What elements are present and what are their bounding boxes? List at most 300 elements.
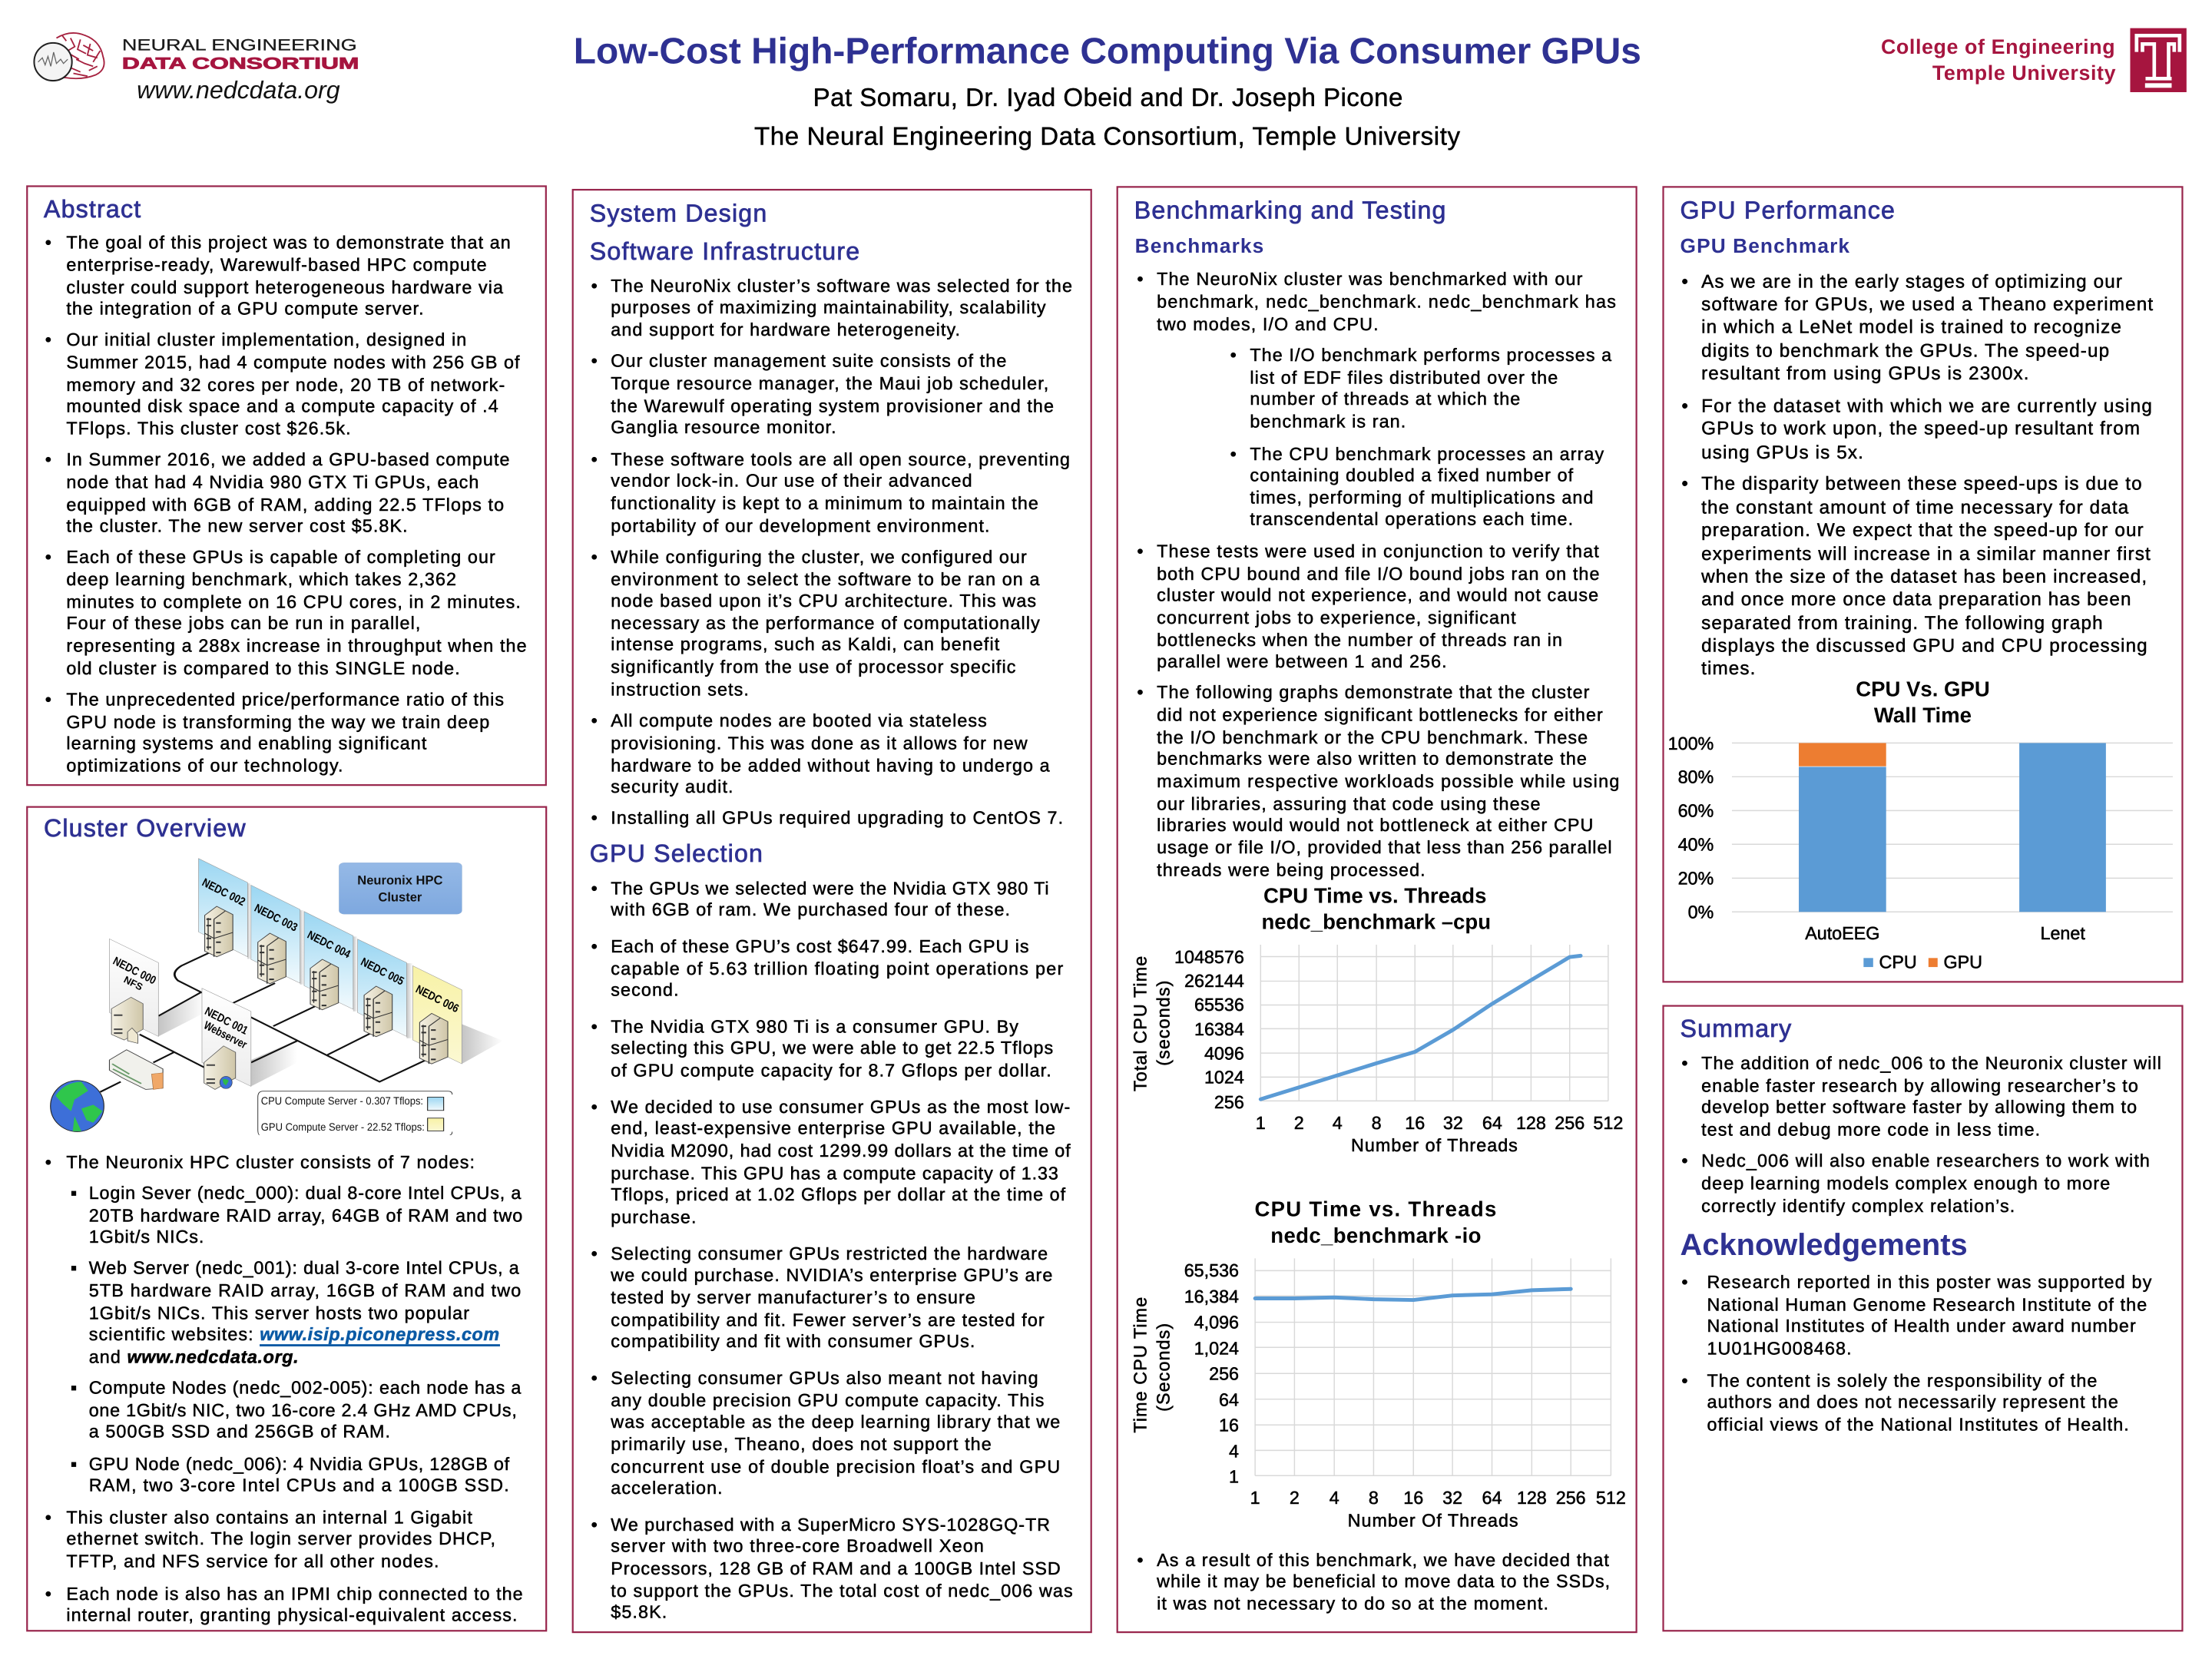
college name: Temple University xyxy=(1932,63,2117,85)
text: software infrastructure bullets: functionality is kept to a minimum to maintain the xyxy=(611,494,1039,514)
heading: GPU benchmark: GPU Benchmark xyxy=(1681,236,1850,258)
text: GPU benchmark bullets: and once more once data preparation has been xyxy=(1701,588,2132,609)
text: software infrastructure bullets: • xyxy=(591,276,598,296)
heading: GPU performance: GPU Performance xyxy=(1681,196,1896,224)
text: benchmark bullets: concurrent jobs to experience, significant xyxy=(1157,608,1517,628)
text: software infrastructure bullets xyxy=(591,276,1073,828)
panel: cluster overview xyxy=(27,807,546,1631)
text: abstract bullets: The goal of this project was to demonstrate that an xyxy=(66,233,512,253)
text: abstract bullets: equipped with 6GB of RAM, adding 22.5 TFlops to xyxy=(66,495,505,515)
text: abstract bullets: Our initial cluster implementation, designed in xyxy=(66,330,467,350)
text: node list: scientific websites: xyxy=(89,1325,260,1344)
text: abstract bullets: mounted disk space and a compute capacity of .4 xyxy=(66,396,499,416)
text: abstract bullets: old cluster is compared to this SINGLE node. xyxy=(66,659,461,678)
text: benchmark bullets: These tests were used in conjunction to verify that xyxy=(1157,541,1600,561)
text: GPU selection bullets: compatibility and fit. Fewer server’s are tested for xyxy=(611,1310,1045,1330)
title: Low-Cost High-Performance Computing Via Consumer GPUs xyxy=(574,30,1641,72)
text: software infrastructure bullets: provisioning. This was done as it allows for new xyxy=(611,733,1028,753)
text: software infrastructure bullets: All compute nodes are booted via stateless xyxy=(611,711,988,730)
text: benchmark bullets xyxy=(1137,270,1621,880)
text: software infrastructure bullets: hardware to be added without having to undergo a xyxy=(611,756,1051,776)
chart: CPU time vs threads, cpu benchmark: 1048576 xyxy=(1174,948,1244,968)
text: software infrastructure bullets: intense programs, such as Kaldi, can benefit xyxy=(611,635,1000,654)
text: abstract bullets: • xyxy=(45,690,52,710)
text: abstract bullets: memory and 32 cores per node, 20 TB of network- xyxy=(66,376,505,395)
chart: CPU time vs threads, cpu benchmark: Total CPU Time xyxy=(1131,955,1151,1091)
text: benchmark bullets: containing doubled a fixed number of xyxy=(1250,465,1574,485)
diagram: Neuronix HPC cluster network: NEDC 000 xyxy=(111,955,158,987)
text: GPU selection bullets: we could purchase. NVIDIA’s enterprise GPU’s are xyxy=(609,1266,1053,1285)
logo: Neural Engineering Data Consortium: www.nedcdata.org xyxy=(137,76,340,104)
chart: CPU time vs threads, io benchmark: Number Of Threads xyxy=(1348,1511,1519,1531)
text: GPU benchmark bullets: preparation. We expect that the speed-up for our xyxy=(1701,518,2144,540)
chart: CPU time vs threads, cpu benchmark: 65536 xyxy=(1194,995,1244,1015)
text: node list: Each node is also has an IPMI chip connected to the xyxy=(66,1584,524,1604)
text: GPU selection bullets: • xyxy=(591,1017,598,1037)
chart: CPU vs GPU wall time: CPU xyxy=(1879,953,1917,972)
text: GPU selection bullets: to support the GPUs. The total cost of nedc_006 was xyxy=(611,1581,1074,1601)
text: node list: • xyxy=(45,1584,52,1604)
text: GPU benchmark bullets: when the size of the dataset has been increased, xyxy=(1700,565,2147,586)
text: software infrastructure bullets: • xyxy=(591,450,598,470)
text: GPU selection bullets: • xyxy=(591,1098,598,1118)
chart: CPU time vs threads, io benchmark: 32 xyxy=(1442,1488,1462,1508)
text: summary bullets: correctly identify complex relation’s. xyxy=(1701,1197,2015,1216)
text: GPU benchmark bullets: • xyxy=(1681,472,1689,493)
text: GPU selection bullets: The GPUs we selected were the Nvidia GTX 980 Ti xyxy=(611,879,1050,899)
text: GPU benchmark bullets: using GPUs is 5x. xyxy=(1701,441,1864,462)
text: GPU selection bullets: capable of 5.63 trillion floating point operations per xyxy=(611,959,1065,979)
chart: CPU time vs threads, cpu benchmark: 4 xyxy=(1333,1114,1343,1134)
text: software infrastructure bullets: These software tools are all open source, preventing xyxy=(611,450,1071,470)
text: GPU selection bullets: • xyxy=(591,879,598,899)
chart: CPU vs GPU wall time: 0% xyxy=(1688,903,1714,922)
logo: Neural Engineering Data Consortium xyxy=(34,33,359,104)
text: node list: and xyxy=(89,1347,127,1367)
text: abstract bullets: The unprecedented price/performance ratio of this xyxy=(66,690,505,710)
chart: CPU time vs threads, cpu benchmark: 128 xyxy=(1516,1114,1546,1134)
chart: CPU vs GPU wall time: 20% xyxy=(1678,869,1714,889)
text: GPU benchmark bullets: software for GPUs, we used a Theano experiment xyxy=(1701,293,2154,314)
panel: system design xyxy=(573,190,1091,1632)
chart: CPU time vs threads, cpu benchmark: 4096 xyxy=(1204,1044,1244,1064)
icon: EEG circle xyxy=(34,43,72,81)
logo: Neural Engineering Data Consortium: NEURAL ENGINEERING xyxy=(122,38,357,55)
text: abstract bullets: cluster could support heterogeneous hardware via xyxy=(66,278,505,298)
text: benchmark bullets: • xyxy=(1137,270,1144,290)
diagram: Neuronix HPC cluster network: NEDC 001 xyxy=(203,1005,250,1038)
text: benchmark conclusion: while it may be beneficial to move data to the SSDs, xyxy=(1155,1571,1611,1591)
text: node list xyxy=(45,1153,524,1625)
text: benchmark bullets: parallel were between 1 and 256. xyxy=(1157,652,1448,671)
text: GPU selection bullets: tested by server manufacturer’s to ensure xyxy=(611,1288,976,1308)
text: abstract bullets: In Summer 2016, we added a GPU-based compute xyxy=(66,450,511,470)
text: summary bullets: deep learning models complex enough to more xyxy=(1701,1174,2111,1194)
text: GPU selection bullets: any double precision GPU compute capacity. This xyxy=(611,1391,1045,1411)
text: GPU selection bullets: with 6GB of ram. We purchased four of these. xyxy=(609,900,1011,920)
text: summary bullets xyxy=(1681,1054,2162,1216)
heading: summary: Summary xyxy=(1681,1015,1792,1042)
text: GPU selection bullets: server with two three-core Broadwell Xeon xyxy=(611,1536,985,1556)
diagram: Neuronix HPC cluster network: NEDC 005 xyxy=(359,955,406,988)
text: GPU benchmark bullets: • xyxy=(1681,394,1689,416)
text: GPU selection bullets: acceleration. xyxy=(611,1479,724,1498)
chart: CPU time vs threads, cpu benchmark: 32 xyxy=(1443,1114,1463,1134)
text: node list: 1Gbit/s NICs. This server hosts two popular xyxy=(89,1303,470,1323)
chart: CPU time vs threads, cpu benchmark: 256 xyxy=(1555,1114,1584,1134)
text: node list: www.isip.piconepress.com xyxy=(260,1325,500,1344)
chart: CPU time vs threads, cpu benchmark: (seconds) xyxy=(1154,980,1174,1066)
chart: CPU time vs threads, io benchmark: 512 xyxy=(1596,1488,1626,1508)
text: GPU benchmark bullets: As we are in the early stages of optimizing our xyxy=(1701,270,2123,291)
text: GPU selection bullets: purchase. xyxy=(611,1207,697,1227)
text: node list: • xyxy=(45,1153,52,1172)
text: GPU selection bullets: Selecting consumer GPUs also meant not having xyxy=(611,1369,1039,1388)
text: GPU selection bullets: Processors, 128 GB of RAM and a 100GB Intel SSD xyxy=(611,1559,1061,1578)
text: GPU selection bullets: • xyxy=(591,937,598,956)
text: node list: Web Server (nedc_001): dual 3-core Intel CPUs, a xyxy=(89,1258,520,1278)
chart: CPU time vs threads, io benchmark: 2 xyxy=(1290,1488,1300,1508)
text: node list: TFTP, and NFS service for all other nodes. xyxy=(66,1551,440,1571)
text: acknowledgements bullets: Research reported in this poster was supported by xyxy=(1707,1273,2153,1292)
text: abstract bullets xyxy=(45,233,528,776)
text: benchmark bullets: benchmark, nedc_benchmark. nedc_benchmark has xyxy=(1157,292,1617,312)
heading: cluster overview: Cluster Overview xyxy=(44,814,247,843)
chart: CPU time vs threads, io benchmark: 256 xyxy=(1209,1364,1239,1384)
text: node list: RAM, two 3-core Intel CPUs and a 100GB SSD. xyxy=(89,1475,510,1495)
heading: abstract: Abstract xyxy=(44,194,141,223)
text: GPU benchmark bullets: separated from training. The following graph xyxy=(1701,611,2104,633)
text: GPU benchmark bullets xyxy=(1681,270,2154,678)
text: software infrastructure bullets: instruction sets. xyxy=(611,680,750,700)
text: benchmark bullets: libraries would would not bottleneck at either CPU xyxy=(1157,816,1594,835)
text: summary bullets: • xyxy=(1681,1054,1689,1074)
heading: benchmarks: Benchmarks xyxy=(1135,236,1264,258)
text: software infrastructure bullets: node based upon it’s CPU architecture. This was xyxy=(611,591,1037,611)
text: benchmark bullets: The following graphs demonstrate that the cluster xyxy=(1157,683,1591,703)
icon: Temple T logo xyxy=(2130,28,2187,92)
diagram: Neuronix HPC cluster network: NEDC 002 xyxy=(200,876,247,909)
text: software infrastructure bullets: Torque resource manager, the Maui job scheduler, xyxy=(611,374,1049,393)
text: software infrastructure bullets: While configuring the cluster, we configured our xyxy=(611,548,1028,567)
text: GPU selection bullets: of GPU compute capacity for 8.7 Gflops per dollar. xyxy=(611,1061,1052,1081)
chart: CPU vs GPU wall time: GPU xyxy=(1943,953,1982,972)
text: acknowledgements bullets: • xyxy=(1681,1273,1689,1292)
text: GPU selection bullets: We decided to use consumer GPUs as the most low- xyxy=(611,1098,1071,1118)
text: GPU selection bullets: purchase. This GPU has a compute capacity of 1.33 xyxy=(611,1164,1059,1184)
text: benchmark conclusion: • xyxy=(1137,1551,1144,1570)
chart: CPU vs GPU wall time: 40% xyxy=(1678,835,1714,855)
text: node list: internal router, granting physical-equivalent access. xyxy=(66,1605,518,1625)
text: node list: Login Sever (nedc_000): dual 8-core Intel CPUs, a xyxy=(89,1184,522,1204)
text: abstract bullets: Four of these jobs can be run in parallel, xyxy=(66,614,421,634)
text: acknowledgements bullets: • xyxy=(1681,1371,1689,1391)
diagram: Neuronix HPC cluster network: NEDC 004 xyxy=(305,929,353,961)
text: software infrastructure bullets: significantly from the use of processor specific xyxy=(611,657,1017,677)
chart: CPU vs GPU wall time xyxy=(1668,678,2173,972)
chart: CPU time vs threads, io benchmark: (Seconds) xyxy=(1154,1323,1174,1412)
chart: CPU time vs threads, cpu benchmark: 262144 xyxy=(1184,972,1244,991)
chart: CPU vs GPU wall time: 80% xyxy=(1678,767,1714,787)
text: abstract bullets: deep learning benchmark, which takes 2,362 xyxy=(66,570,457,590)
text: benchmark bullets: maximum respective workloads possible while using xyxy=(1157,772,1621,791)
text: abstract bullets: enterprise-ready, Warewulf-based HPC compute xyxy=(66,255,488,275)
chart: CPU time vs threads, io benchmark: CPU Time vs. Threads xyxy=(1254,1197,1498,1222)
text: GPU benchmark bullets: For the dataset with which we are currently using xyxy=(1701,394,2153,416)
diagram: Neuronix HPC cluster network: Neuronix HPC xyxy=(357,873,443,887)
text: abstract bullets: minutes to complete on 16 CPU cores, in 2 minutes. xyxy=(66,592,522,612)
chart: CPU vs GPU wall time: Lenet xyxy=(2041,924,2086,944)
text: acknowledgements bullets: The content is solely the responsibility of the xyxy=(1707,1371,2098,1391)
text: GPU benchmark bullets: GPUs to work upon, the speed-up resultant from xyxy=(1701,417,2141,438)
panel: benchmarking and testing xyxy=(1118,187,1637,1632)
text: software infrastructure bullets: security audit. xyxy=(611,777,734,797)
panel: GPU performance xyxy=(1664,187,2182,982)
chart: CPU time vs threads, cpu benchmark: 64 xyxy=(1482,1114,1502,1134)
text: GPU selection bullets: Selecting consumer GPUs restricted the hardware xyxy=(611,1244,1048,1264)
text: benchmark bullets: The NeuroNix cluster was benchmarked with our xyxy=(1157,270,1584,290)
text: GPU selection bullets: Nvidia M2090, had cost 1299.99 dollars at the time of xyxy=(611,1141,1071,1161)
text: abstract bullets: • xyxy=(45,450,52,470)
chart: CPU time vs threads, io benchmark: 4,096 xyxy=(1194,1313,1239,1333)
text: summary bullets: The addition of nedc_006 to the Neuronix cluster will xyxy=(1701,1054,2162,1074)
text: GPU selection bullets: $5.8K. xyxy=(611,1603,667,1622)
text: acknowledgements bullets: National Institutes of Health under award number xyxy=(1707,1316,2137,1336)
text: acknowledgements bullets: 1U01HG008468. xyxy=(1707,1339,1853,1359)
chart: CPU time vs threads, io benchmark: Time CPU Time xyxy=(1131,1296,1151,1433)
diagram: Neuronix HPC cluster network: Webserver xyxy=(202,1019,250,1051)
text: GPU selection bullets: • xyxy=(591,1369,598,1388)
text: benchmark bullets: usage or file I/O, provided that less than 256 parallel xyxy=(1157,838,1613,858)
text: GPU benchmark bullets: experiments will increase in a similar manner first xyxy=(1701,542,2151,564)
text: abstract bullets: Each of these GPUs is capable of completing our xyxy=(66,548,496,567)
chart: CPU time vs threads, io benchmark: 64 xyxy=(1219,1390,1239,1410)
chart: CPU time vs threads, io benchmark: 256 xyxy=(1556,1488,1586,1508)
text: acknowledgements bullets: authors and does not necessarily represent the xyxy=(1707,1392,2119,1412)
text: abstract bullets: TFlops. This cluster cost $26.5k. xyxy=(66,419,352,439)
text: abstract bullets: • xyxy=(45,330,52,350)
chart: CPU time vs threads, io benchmark: 16,384 xyxy=(1184,1287,1239,1307)
chart: CPU time vs threads, cpu benchmark: nedc_benchmark –cpu xyxy=(1261,911,1491,935)
text: node list: • xyxy=(45,1508,52,1528)
text: GPU selection bullets: selecting this GPU, we were able to get 22.5 Tflops xyxy=(611,1038,1054,1058)
diagram: Neuronix HPC cluster network: GPU Compute Server - 22.52 Tflops: xyxy=(261,1121,425,1133)
text: benchmark bullets: the I/O benchmark or the CPU benchmark. These xyxy=(1157,728,1588,747)
text: node list: This cluster also contains an internal 1 Gigabit xyxy=(66,1508,473,1528)
panel: abstract xyxy=(27,186,546,785)
text: software infrastructure bullets: necessary as the performance of computationally xyxy=(611,614,1041,634)
text: GPU selection bullets: The Nvidia GTX 980 Ti is a consumer GPU. By xyxy=(611,1017,1019,1037)
heading: benchmarking and testing: Benchmarking and Testing xyxy=(1134,196,1447,224)
text: GPU selection bullets: compatibility and fit with consumer GPUs. xyxy=(611,1332,975,1352)
chart: CPU vs GPU wall time: Wall Time xyxy=(1874,704,1972,728)
text: summary bullets: enable faster research by allowing researcher’s to xyxy=(1701,1076,2139,1096)
text: summary bullets: Nedc_006 will also enable researchers to work with xyxy=(1701,1151,2151,1171)
chart: CPU time vs threads, cpu benchmark: 1024 xyxy=(1204,1068,1244,1088)
text: GPU selection bullets: was acceptable as the deep learning library that we xyxy=(609,1412,1061,1432)
chart: CPU time vs threads, cpu benchmark: 16384 xyxy=(1194,1020,1244,1040)
text: GPU benchmark bullets: digits to benchmark the GPUs. The speed-up xyxy=(1701,339,2110,360)
text: summary bullets: develop better software faster by allowing them to xyxy=(1701,1098,2137,1118)
college name: College of Engineering xyxy=(1881,37,2115,59)
text: software infrastructure bullets: environment to select the software to be ran on a xyxy=(611,570,1041,590)
icon: brain xyxy=(56,33,104,78)
text: GPU selection bullets xyxy=(591,879,1074,1622)
heading: software infrastructure: Software Infrastructure xyxy=(590,237,860,265)
text: GPU selection bullets: • xyxy=(591,1515,598,1535)
chart: CPU time vs threads, io benchmark: 16 xyxy=(1403,1488,1423,1508)
text: benchmark bullets: bottlenecks when the number of threads ran in xyxy=(1157,631,1563,651)
heading: system design: System Design xyxy=(590,199,767,227)
text: abstract bullets: node that had 4 Nvidia 980 GTX Ti GPUs, each xyxy=(66,472,479,492)
chart: CPU time vs threads, cpu benchmark: 16 xyxy=(1405,1114,1425,1134)
text: benchmark bullets: list of EDF files distributed over the xyxy=(1250,368,1558,388)
text: abstract bullets: learning systems and enabling significant xyxy=(66,733,427,753)
text: GPU selection bullets: Each of these GPU’s cost $647.99. Each GPU is xyxy=(611,937,1029,956)
text: benchmark bullets: • xyxy=(1230,445,1237,464)
heading: GPU selection: GPU Selection xyxy=(590,839,763,868)
authors: Pat Somaru, Dr. Iyad Obeid and Dr. Joseph Picone xyxy=(813,83,1403,111)
text: GPU benchmark bullets: displays the discussed GPU and CPU processing xyxy=(1701,634,2148,655)
chart: CPU time vs threads, cpu benchmark: 2 xyxy=(1294,1114,1304,1134)
chart: CPU time vs threads, cpu benchmark: 1 xyxy=(1256,1114,1266,1134)
text: benchmark bullets: • xyxy=(1137,541,1144,561)
chart: CPU time vs threads, io benchmark: 65,536 xyxy=(1184,1261,1239,1281)
logo: Neural Engineering Data Consortium: DATA CONSORTIUM xyxy=(122,56,359,73)
text: benchmark bullets: did not experience significant bottlenecks for either xyxy=(1157,705,1604,725)
chart: CPU time vs threads, io benchmark: 1 xyxy=(1250,1488,1260,1508)
chart: CPU time vs threads, io benchmark xyxy=(1131,1197,1626,1531)
text: software infrastructure bullets: purposes of maximizing maintainability, scalability xyxy=(611,298,1047,317)
chart: CPU time vs threads, io benchmark: 1,024 xyxy=(1194,1339,1239,1359)
chart: CPU vs GPU wall time: 60% xyxy=(1678,801,1714,821)
text: benchmark bullets: The I/O benchmark performs processes a xyxy=(1250,346,1613,366)
text: benchmark bullets: cluster would not experience, and would not cause xyxy=(1157,585,1599,605)
text: node list: The Neuronix HPC cluster consists of 7 nodes: xyxy=(66,1153,475,1172)
affiliation: The Neural Engineering Data Consortium, Temple University xyxy=(754,122,1461,151)
text: GPU selection bullets: We purchased with a SuperMicro SYS-1028GQ-TR xyxy=(611,1515,1051,1535)
text: node list: a 500GB SSD and 256GB of RAM. xyxy=(89,1422,391,1442)
text: GPU selection bullets: end, least-expensive enterprise GPU available, the xyxy=(611,1119,1056,1138)
text: GPU selection bullets: second. xyxy=(611,981,680,1000)
chart: CPU time vs threads, io benchmark: 4 xyxy=(1330,1488,1339,1508)
text: benchmark bullets: our libraries, assuring that code using these xyxy=(1157,794,1541,814)
chart: CPU vs GPU wall time: CPU Vs. GPU xyxy=(1856,678,1990,702)
text: software infrastructure bullets: vendor lock-in. Our use of their advanced xyxy=(611,471,973,491)
text: benchmark bullets: • xyxy=(1230,346,1237,366)
text: GPU benchmark bullets: resultant from using GPUs is 2300x. xyxy=(1701,362,2030,383)
text: software infrastructure bullets: and support for hardware heterogeneity. xyxy=(611,320,961,340)
text: benchmark bullets: • xyxy=(1137,683,1144,703)
chart: CPU time vs threads, cpu benchmark: Number of Threads xyxy=(1351,1136,1518,1156)
diagram: Neuronix HPC cluster network xyxy=(51,859,503,1134)
text: summary bullets: test and debug more code in less time. xyxy=(1701,1120,2041,1140)
text: GPU benchmark bullets: the constant amount of time necessary for data xyxy=(1701,496,2129,517)
text: acknowledgements bullets xyxy=(1681,1273,2153,1435)
text: software infrastructure bullets: • xyxy=(591,351,598,371)
chart: CPU time vs threads, io benchmark: 16 xyxy=(1219,1416,1239,1435)
heading: acknowledgements: Acknowledgements xyxy=(1681,1227,1968,1262)
text: GPU selection bullets: concurrent use of double precision float’s and GPU xyxy=(611,1457,1061,1477)
text: abstract bullets: • xyxy=(45,548,52,567)
text: abstract bullets: the cluster. The new server cost $5.8K. xyxy=(66,516,409,536)
text: benchmark conclusion: As a result of this benchmark, we have decided that xyxy=(1157,1551,1610,1570)
text: benchmark bullets: benchmarks were also written to demonstrate the xyxy=(1157,749,1588,769)
text: GPU selection bullets: primarily use, Theano, does not support the xyxy=(611,1435,992,1455)
diagram: Neuronix HPC cluster network: NEDC 006 xyxy=(413,983,462,1015)
chart: CPU time vs threads, io benchmark: 1 xyxy=(1229,1467,1239,1487)
text: software infrastructure bullets: • xyxy=(591,808,598,828)
diagram: Neuronix HPC cluster network: Cluster xyxy=(378,890,422,904)
text: benchmark bullets: benchmark is ran. xyxy=(1250,412,1406,432)
text: abstract bullets: • xyxy=(45,233,52,253)
text: abstract bullets: Summer 2015, had 4 compute nodes with 256 GB of xyxy=(66,353,520,373)
text: node list: ▪ xyxy=(71,1378,78,1398)
text: acknowledgements bullets: official views of the National Institutes of Health. xyxy=(1707,1415,2130,1435)
text: abstract bullets: optimizations of our technology. xyxy=(66,756,344,776)
chart: CPU time vs threads, io benchmark: 4 xyxy=(1229,1442,1239,1462)
text: benchmark bullets: threads were being processed. xyxy=(1157,860,1426,880)
text: node list: 5TB hardware RAID array, 16GB of RAM and two xyxy=(89,1281,522,1300)
chart: CPU time vs threads, io benchmark: nedc_benchmark -io xyxy=(1270,1224,1482,1249)
text: GPU benchmark bullets: The disparity between these speed-ups is due to xyxy=(1701,472,2143,493)
chart: CPU time vs threads, cpu benchmark xyxy=(1131,885,1623,1156)
diagram: Neuronix HPC cluster network: CPU Compute Server - 0.307 Tflops: xyxy=(261,1094,423,1108)
text: node list: ▪ xyxy=(71,1258,78,1278)
text: benchmark conclusion: it was not necessary to do so at the moment. xyxy=(1157,1594,1549,1614)
text: GPU benchmark bullets: times. xyxy=(1701,657,1757,678)
text: GPU selection bullets: • xyxy=(591,1244,598,1264)
diagram: Neuronix HPC cluster network: NEDC 003 xyxy=(253,902,300,935)
text: GPU benchmark bullets: • xyxy=(1681,270,1689,291)
chart: CPU time vs threads, cpu benchmark: 512 xyxy=(1593,1114,1623,1134)
text: software infrastructure bullets: portability of our development environment. xyxy=(611,516,991,536)
text: software infrastructure bullets: Ganglia resource monitor. xyxy=(611,418,837,437)
text: node list: www.nedcdata.org. xyxy=(127,1347,299,1367)
text: abstract bullets: the integration of a GPU compute server. xyxy=(66,299,425,319)
text: software infrastructure bullets: Installing all GPUs required upgrading to CentOS 7. xyxy=(611,808,1064,828)
chart: CPU time vs threads, io benchmark: 128 xyxy=(1517,1488,1547,1508)
chart: CPU time vs threads, io benchmark: 64 xyxy=(1482,1488,1502,1508)
text: GPU selection bullets: Tflops, priced at 1.02 Gflops per dollar at the time of xyxy=(611,1185,1066,1205)
text: summary bullets: • xyxy=(1681,1151,1689,1171)
text: node list: 20TB hardware RAID array, 64GB of RAM and two xyxy=(89,1206,523,1226)
text: abstract bullets: GPU node is transforming the way we train deep xyxy=(66,713,490,732)
text: node list: Compute Nodes (nedc_002-005): each node has a xyxy=(89,1378,522,1398)
chart: CPU vs GPU wall time: 100% xyxy=(1668,734,1714,754)
panel: summary and acknowledgements xyxy=(1664,1006,2182,1631)
chart: CPU vs GPU wall time: AutoEEG xyxy=(1805,924,1879,944)
text: node list: ▪ xyxy=(71,1455,78,1474)
chart: CPU time vs threads, cpu benchmark: 256 xyxy=(1214,1093,1244,1112)
text: GPU benchmark bullets: in which a LeNet model is trained to recognize xyxy=(1701,316,2122,336)
text: software infrastructure bullets: The NeuroNix cluster’s software was selected for the xyxy=(611,276,1073,296)
chart: CPU time vs threads, io benchmark: 8 xyxy=(1369,1488,1379,1508)
text: benchmark bullets: The CPU benchmark processes an array xyxy=(1250,445,1604,464)
text: benchmark bullets: transcendental operations each time. xyxy=(1250,509,1574,529)
chart: CPU time vs threads, cpu benchmark: CPU Time vs. Threads xyxy=(1263,885,1486,909)
text: benchmark bullets: times, performing of multiplications and xyxy=(1250,488,1594,508)
text: acknowledgements bullets: National Human Genome Research Institute of the xyxy=(1707,1295,2147,1315)
text: node list: ethernet switch. The login server provides DHCP, xyxy=(66,1529,496,1549)
text: node list: one 1Gbit/s NIC, two 16-core 2.4 GHz AMD CPUs, xyxy=(89,1401,518,1421)
text: software infrastructure bullets: • xyxy=(591,711,598,730)
chart: CPU time vs threads, cpu benchmark: 8 xyxy=(1372,1114,1382,1134)
text: benchmark bullets: two modes, I/O and CPU. xyxy=(1157,315,1379,334)
text: benchmark bullets: both CPU bound and file I/O bound jobs ran on the xyxy=(1157,565,1601,584)
text: benchmark bullets: number of threads at which the xyxy=(1250,389,1521,409)
text: software infrastructure bullets: the Warewulf operating system provisioner and the xyxy=(611,396,1055,416)
